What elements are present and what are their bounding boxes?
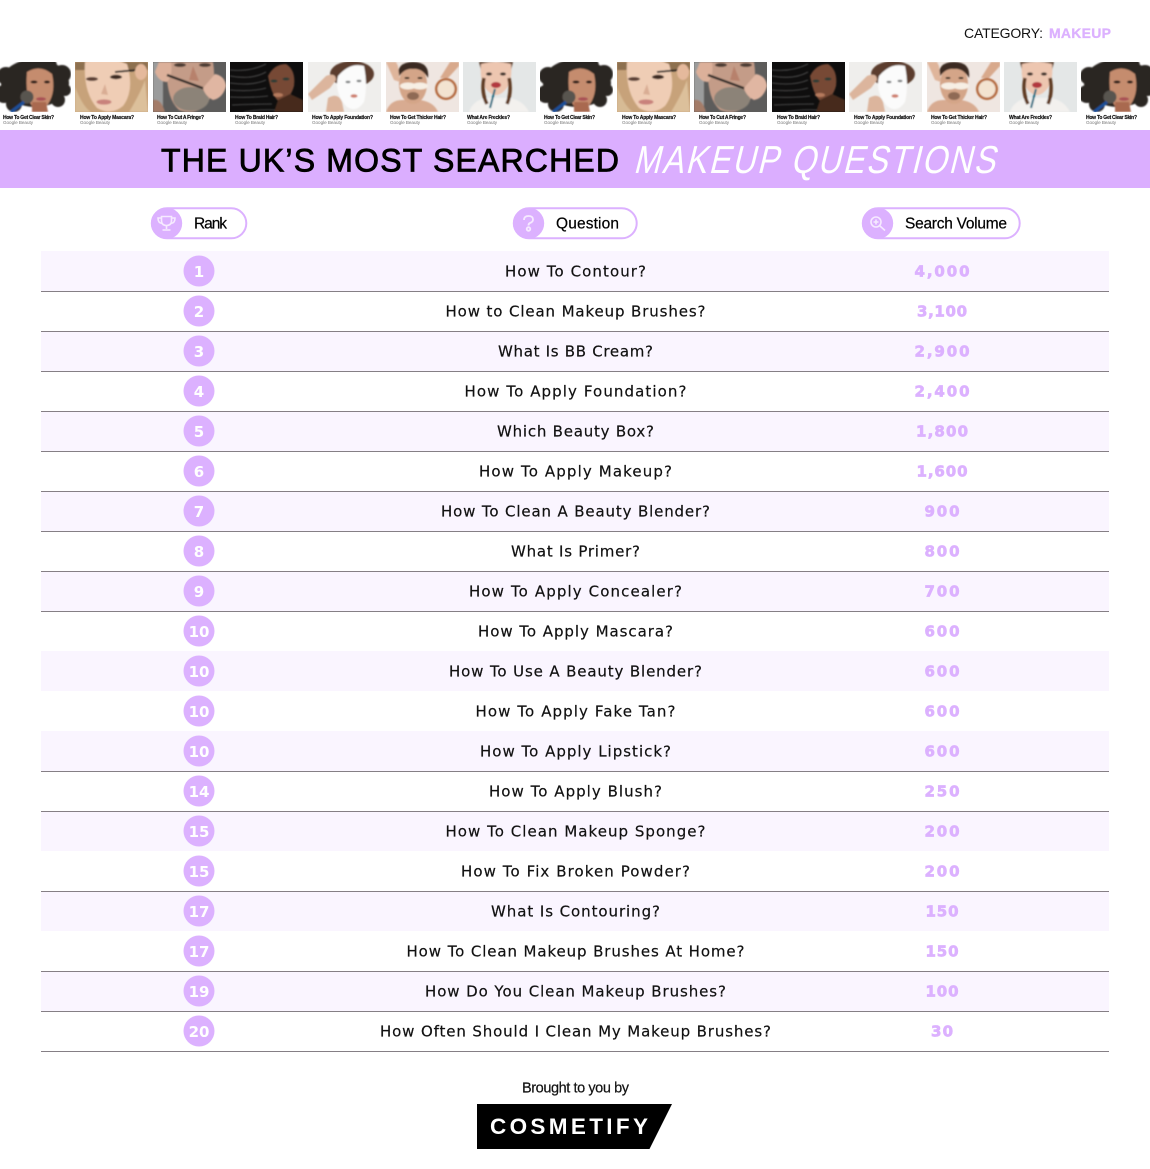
question 15: How To Clean Makeup Sponge?	[446, 822, 706, 840]
thumbnail 13: How To Get Thicker Hair?	[931, 115, 987, 121]
rank 14: 14	[189, 783, 209, 801]
thumbnail 13: Google Beauty	[931, 120, 962, 125]
thumbnail 14	[1004, 62, 1077, 125]
rank 19	[184, 976, 214, 1006]
question 11: How To Use A Beauty Blender?	[449, 662, 702, 680]
thumbnail 4: How To Braid Hair?	[235, 115, 278, 121]
rank 17	[184, 896, 214, 926]
question 3: What Is BB Cream?	[498, 342, 653, 360]
question 17: What Is Contouring?	[491, 902, 660, 920]
rank 4	[184, 376, 214, 406]
rank 10	[184, 616, 214, 646]
title: white script text: MAKEUP QUESTIONS	[631, 138, 1003, 182]
thumbnail 14: What Are Freckles?	[1009, 115, 1052, 121]
thumbnail 14: Google Beauty	[1009, 120, 1040, 125]
question 9: How To Apply Concealer?	[469, 582, 682, 600]
row 2	[41, 296, 1109, 332]
row 18	[41, 936, 1109, 972]
volume 5: 1,800	[916, 422, 968, 440]
rank 5: 5	[194, 423, 204, 441]
question 10: How To Apply Mascara?	[478, 622, 673, 640]
thumbnail 6: Google Beauty	[390, 120, 421, 125]
thumbnail 3	[153, 62, 226, 125]
rank 1	[184, 256, 214, 286]
Cosmetify logo	[477, 1104, 672, 1149]
thumbnail 2: Google Beauty	[80, 120, 111, 125]
rank 7: 7	[194, 503, 204, 521]
thumbnail 7: What Are Freckles?	[467, 115, 510, 121]
question 12: How To Apply Fake Tan?	[476, 702, 676, 720]
volume 10: 600	[924, 622, 960, 640]
volume 6: 1,600	[916, 462, 968, 480]
row 5	[41, 412, 1109, 452]
column header: Rank: Rank	[194, 216, 227, 232]
thumbnail 2	[75, 59, 148, 125]
column header: Question: Question	[556, 216, 619, 232]
rank 12: 10	[189, 703, 209, 721]
volume 17: 150	[926, 902, 958, 920]
thumbnail 4	[230, 62, 303, 125]
thumbnail 3: How To Cut A Fringe?	[157, 115, 204, 121]
thumbnail 7: Google Beauty	[467, 120, 498, 125]
thumbnail 8: Google Beauty	[544, 120, 575, 125]
Cosmetify logo: COSMETIFY	[490, 1114, 648, 1139]
row 16	[41, 856, 1109, 892]
rank 8	[184, 536, 214, 566]
rank 13: 10	[189, 743, 209, 761]
footer credit: Brought to you by	[522, 1080, 630, 1096]
thumbnail 6: How To Get Thicker Hair?	[390, 115, 446, 121]
row 19	[41, 972, 1109, 1012]
volume 1: 4,000	[914, 262, 970, 280]
volume 9: 700	[924, 582, 960, 600]
icon: question mark	[524, 216, 533, 231]
rank 10: 10	[189, 623, 209, 641]
question 19: How Do You Clean Makeup Brushes?	[425, 982, 726, 1000]
thumbnail 9: Google Beauty	[622, 120, 653, 125]
thumbnail 9: How To Apply Mascara?	[622, 115, 676, 121]
volume 19: 100	[926, 982, 958, 1000]
rank 14	[184, 776, 214, 806]
thumbnail 8: How To Get Clear Skin?	[544, 115, 595, 121]
rank 9: 9	[194, 583, 204, 601]
thumbnail 5	[308, 61, 381, 125]
rank 1: 1	[194, 263, 204, 281]
row 7	[41, 492, 1109, 532]
volume 2: 3,100	[917, 302, 967, 320]
row 10	[184, 616, 960, 646]
rank 13	[184, 736, 214, 766]
thumbnail 12: How To Apply Foundation?	[854, 115, 915, 121]
thumbnail 15: Google Beauty	[1086, 120, 1117, 125]
category label: CATEGORY:	[964, 25, 1043, 41]
rank 3	[184, 336, 214, 366]
rank 16: 15	[189, 863, 209, 881]
title banner	[0, 130, 1150, 188]
row 17	[41, 892, 1109, 931]
thumbnail 1	[0, 57, 71, 125]
rank 6	[184, 456, 214, 486]
thumbnail 4: Google Beauty	[235, 120, 266, 125]
question 8: What Is Primer?	[511, 542, 640, 560]
rank 9	[184, 576, 214, 606]
thumbnail 6	[386, 62, 459, 125]
thumbnail 10	[694, 62, 767, 125]
icon: magnifier	[871, 217, 885, 230]
row 20	[41, 1016, 1109, 1052]
row 1	[41, 251, 1109, 292]
thumbnail 5: Google Beauty	[312, 120, 343, 125]
volume 14: 250	[924, 782, 960, 800]
rank 20	[184, 1016, 214, 1046]
category label	[964, 25, 1111, 41]
volume 20: 30	[931, 1022, 953, 1040]
thumbnail 12: Google Beauty	[854, 120, 885, 125]
rank 4: 4	[194, 383, 204, 401]
rank 6: 6	[194, 463, 204, 481]
thumbnail 11: Google Beauty	[777, 120, 808, 125]
question 14: How To Apply Blush?	[489, 782, 662, 800]
thumbnail 11: How To Braid Hair?	[777, 115, 820, 121]
volume 4: 2,400	[914, 382, 970, 400]
rank 2: 2	[194, 303, 204, 321]
rank 17: 17	[189, 903, 209, 921]
rank 15: 15	[189, 823, 209, 841]
rank 16	[184, 856, 214, 886]
row 3	[41, 332, 1109, 372]
volume 12: 600	[924, 702, 960, 720]
volume 7: 900	[924, 502, 960, 520]
rank 8: 8	[194, 543, 204, 561]
question 6: How To Apply Makeup?	[479, 462, 672, 480]
volume 13: 600	[924, 742, 960, 760]
title: black text: THE UK’S MOST SEARCHED	[161, 142, 619, 178]
rank 12	[184, 696, 214, 726]
question 13: How To Apply Lipstick?	[480, 742, 671, 760]
thumbnail 8	[537, 57, 613, 125]
rank 3: 3	[194, 343, 204, 361]
rank 5	[184, 416, 214, 446]
row 15	[41, 812, 1109, 851]
rank 15	[184, 816, 214, 846]
rank 7	[184, 496, 214, 526]
rank 2	[184, 296, 214, 326]
thumbnail 10: How To Cut A Fringe?	[699, 115, 746, 121]
image strip of video thumbnails	[0, 57, 1150, 125]
question 4: How To Apply Foundation?	[464, 382, 686, 400]
column header: Question	[513, 208, 637, 239]
question 16: How To Fix Broken Powder?	[461, 862, 690, 880]
thumbnail 1: How To Get Clear Skin?	[3, 115, 54, 121]
volume 16: 200	[924, 862, 960, 880]
question 7: How To Clean A Beauty Blender?	[441, 502, 710, 520]
rank 11	[184, 656, 214, 686]
thumbnail 12	[849, 61, 922, 125]
thumbnail 15: How To Get Clear Skin?	[1086, 115, 1137, 121]
rank 11: 10	[189, 663, 209, 681]
rank 19: 19	[189, 983, 209, 1001]
thumbnail 3: Google Beauty	[157, 120, 188, 125]
rank 18: 17	[189, 943, 209, 961]
category label: MAKEUP	[1049, 25, 1111, 41]
icon: trophy	[158, 216, 175, 230]
row 9	[41, 572, 1109, 612]
question 1: How To Contour?	[505, 262, 646, 280]
row 4	[41, 376, 1109, 412]
volume 11: 600	[924, 662, 960, 680]
row 14	[41, 776, 1109, 812]
row 13	[41, 731, 1109, 772]
row 6	[41, 456, 1109, 492]
question 18: How To Clean Makeup Brushes At Home?	[406, 942, 744, 960]
column header: Search Volume	[862, 208, 1020, 239]
thumbnail 15	[1078, 57, 1150, 125]
thumbnail 11	[772, 62, 845, 125]
thumbnail 10: Google Beauty	[699, 120, 730, 125]
row 12	[184, 696, 960, 726]
thumbnail 1: Google Beauty	[3, 120, 34, 125]
question 5: Which Beauty Box?	[497, 422, 654, 440]
volume 15: 200	[924, 822, 960, 840]
question 20: How Often Should I Clean My Makeup Brushes?	[380, 1022, 771, 1040]
volume 3: 2,900	[914, 342, 970, 360]
thumbnail 9	[617, 59, 690, 125]
column header: Search Volume: Search Volume	[905, 216, 1007, 232]
row 8	[41, 536, 1109, 572]
ranking table	[41, 251, 1109, 1052]
thumbnail 5: How To Apply Foundation?	[312, 115, 373, 121]
rank 18	[184, 936, 214, 966]
thumbnail 13	[927, 62, 1000, 125]
rank 20: 20	[189, 1023, 209, 1041]
volume 8: 800	[924, 542, 960, 560]
thumbnail 7	[463, 62, 536, 125]
question 2: How to Clean Makeup Brushes?	[446, 302, 706, 320]
row 11	[41, 651, 1109, 691]
volume 18: 150	[926, 942, 958, 960]
thumbnail 2: How To Apply Mascara?	[80, 115, 134, 121]
column header: Rank	[151, 208, 246, 239]
